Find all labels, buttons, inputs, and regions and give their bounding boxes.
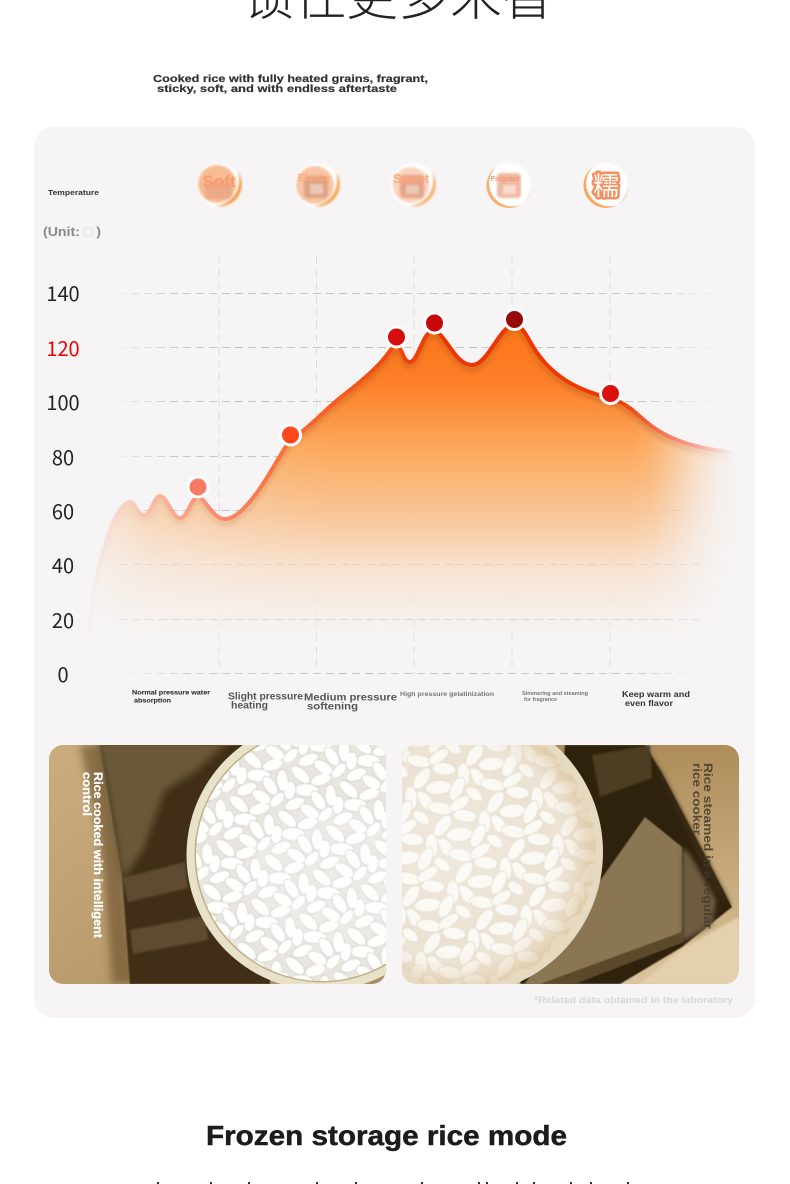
icon: glutinous xyxy=(583,163,628,208)
chart curve line xyxy=(88,325,735,632)
y axis labels: 80 xyxy=(52,442,74,471)
chart area fill xyxy=(85,320,740,675)
clipped subtitle line tops xyxy=(157,1182,629,1184)
icon: soft xyxy=(197,163,242,207)
text block: cooked rice description: sticky, soft, and with endless aftertaste xyxy=(157,83,397,95)
chart: temperature curve xyxy=(85,256,740,675)
y axis labels: 100 xyxy=(46,387,80,416)
y axis labels: 140 xyxy=(46,278,80,307)
x axis stage labels: heating xyxy=(231,700,268,712)
icon: glutinous: 糯 xyxy=(593,166,619,203)
axis title: temperature: Temperature xyxy=(48,188,99,197)
icon: sweet xyxy=(391,163,436,207)
x axis stage labels: absorption xyxy=(134,698,171,704)
x axis stage labels: High pressure gelatinization xyxy=(400,691,494,698)
rotated label: regular rice cooker: Rice steamed in a regular xyxy=(701,763,715,929)
x axis stage labels: Slight pressure xyxy=(228,692,303,702)
icon: soft: Soft xyxy=(202,172,236,191)
rotated label line two: rice cooker xyxy=(690,763,704,835)
x axis stage labels: softening xyxy=(307,700,358,712)
icon: elastic xyxy=(295,163,340,207)
rotated label: intelligent control: Rice cooked with intelligent xyxy=(91,772,103,938)
photo: rice steamed in a regular rice cooker xyxy=(402,745,739,984)
y axis labels: 0 xyxy=(57,659,69,688)
icon: elastic: Elastic xyxy=(298,173,331,184)
x axis stage labels: Keep warm and xyxy=(622,690,690,699)
chart data points xyxy=(188,310,620,497)
x axis stage labels: Medium pressure xyxy=(304,692,397,704)
text block: cooked rice description xyxy=(153,73,428,95)
x axis stage labels: even flavor xyxy=(625,699,673,708)
icon: fragrant: Fragrant xyxy=(491,176,520,183)
y axis labels: 40 xyxy=(52,550,74,579)
y axis labels: 60 xyxy=(52,496,74,525)
icon: fragrant xyxy=(486,163,531,208)
x axis stage labels: Simmering and steaming xyxy=(522,691,588,697)
x axis stage labels: for fragrance xyxy=(524,697,557,703)
axis unit: (Unit: □ ) xyxy=(43,224,101,239)
text block: cooked rice description: Cooked rice with fully heated grains, fragrant, xyxy=(153,73,428,85)
rotated label line two: control xyxy=(80,772,92,816)
x axis stage labels: Normal pressure water xyxy=(132,690,211,696)
icon: sweet: Sweet xyxy=(393,172,430,186)
y axis labels xyxy=(46,278,80,688)
y axis labels: 120 xyxy=(46,333,80,362)
panel: temperature chart and rice comparison xyxy=(34,127,755,1018)
y axis labels: 20 xyxy=(52,605,74,634)
x axis stage labels xyxy=(132,690,690,712)
photo: rice cooked with intelligent control xyxy=(49,745,386,984)
heading: frozen storage rice mode: Frozen storage rice mode xyxy=(206,1120,567,1151)
footnote: *Related data obtained in the laboratory xyxy=(534,995,733,1005)
